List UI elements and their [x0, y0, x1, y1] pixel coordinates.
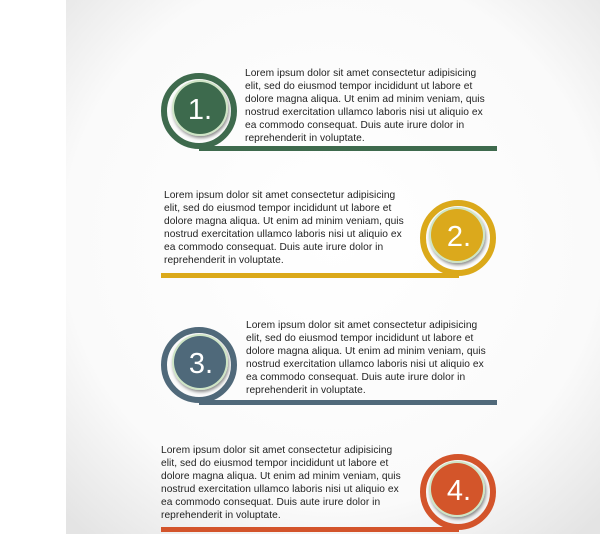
ring 1	[164, 76, 234, 146]
badge 3: 3.	[189, 348, 213, 380]
step 2	[161, 190, 493, 278]
text 4: nostrud exercitation ullamco laboris nisi ut aliquio ex	[161, 484, 399, 495]
badge 2	[429, 207, 485, 263]
ring 2	[423, 203, 493, 273]
text 3: elit, sed do eiusmod tempor incididunt ut labore et	[246, 333, 473, 344]
text 1: elit, sed do eiusmod tempor incididunt ut labore et	[245, 81, 472, 92]
text 2: elit, sed do eiusmod tempor incididunt ut labore et	[164, 203, 391, 214]
text 4: ea commodo consequat. Duis aute irure dolor in	[161, 497, 380, 508]
text 2: dolore magna aliqua. Ut enim ad minim veniam, quis	[164, 216, 404, 227]
bar 1	[199, 146, 497, 151]
badge 3	[172, 334, 228, 390]
badge 2: 2.	[447, 221, 471, 253]
text 3: dolore magna aliqua. Ut enim ad minim veniam, quis	[246, 346, 486, 357]
text 3: ea commodo consequat. Duis aute irure dolor in	[246, 372, 465, 383]
step 3	[164, 320, 497, 405]
text 1: ea commodo consequat. Duis aute irure dolor in	[245, 120, 464, 131]
text 2: Lorem ipsum dolor sit amet consectetur adipisicing	[164, 190, 396, 201]
text 1: Lorem ipsum dolor sit amet consectetur adipisicing	[245, 68, 477, 79]
badge 4: 4.	[447, 475, 471, 507]
badge 1: 1.	[188, 94, 212, 126]
text 2: reprehenderit in voluptate.	[164, 255, 284, 266]
text 1: nostrud exercitation ullamco laboris nisi ut aliquio ex	[245, 107, 483, 118]
text 3: nostrud exercitation ullamco laboris nisi ut aliquio ex	[246, 359, 484, 370]
bar 4	[161, 527, 459, 532]
badge 4	[429, 461, 485, 517]
text 1: dolore magna aliqua. Ut enim ad minim veniam, quis	[245, 94, 485, 105]
text 2: ea commodo consequat. Duis aute irure dolor in	[164, 242, 383, 253]
ring 4	[423, 457, 493, 527]
text 3: Lorem ipsum dolor sit amet consectetur adipisicing	[246, 320, 478, 331]
text 1: reprehenderit in voluptate.	[245, 133, 365, 144]
text 4: reprehenderit in voluptate.	[161, 510, 281, 521]
text 3: reprehenderit in voluptate.	[246, 385, 366, 396]
bar 3	[199, 400, 497, 405]
text 4: dolore magna aliqua. Ut enim ad minim veniam, quis	[161, 471, 401, 482]
badge 1	[172, 80, 228, 136]
bar 2	[161, 273, 459, 278]
ring 3	[164, 330, 234, 400]
step 4	[161, 445, 493, 532]
text 4: Lorem ipsum dolor sit amet consectetur adipisicing	[161, 445, 393, 456]
text 2: nostrud exercitation ullamco laboris nisi ut aliquio ex	[164, 229, 402, 240]
text 4: elit, sed do eiusmod tempor incididunt ut labore et	[161, 458, 388, 469]
step 1	[164, 68, 497, 151]
